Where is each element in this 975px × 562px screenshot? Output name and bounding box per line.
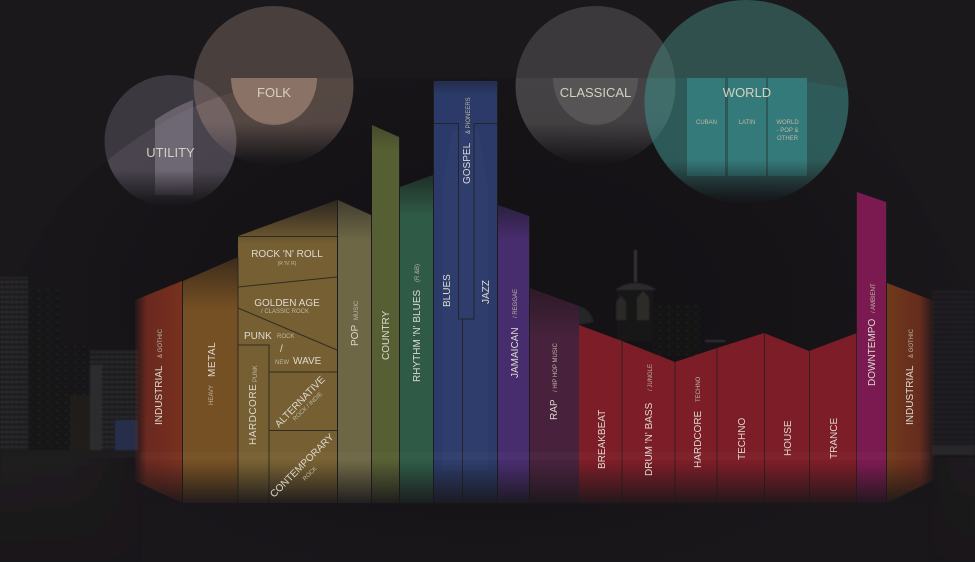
- bar: pop: [338, 200, 371, 503]
- circle: classical: [516, 6, 676, 156]
- label: punk new wave: [244, 331, 322, 367]
- label: rap: [549, 343, 560, 420]
- label: classical: CLASSICAL: [560, 85, 631, 100]
- bar group: rock: [238, 200, 337, 503]
- bar: rap: [530, 288, 579, 503]
- label: industrial left: & GOTHIC: [158, 328, 164, 358]
- label: world pop and other: - POP &: [777, 128, 798, 134]
- divider lines: [182, 81, 886, 503]
- circle: world: [644, 0, 848, 196]
- label: rhythm n blues: RHYTHM 'N' BLUES: [412, 290, 423, 382]
- label: gospel: [462, 97, 473, 184]
- label: world pop and other: OTHER: [777, 136, 799, 142]
- bar: jamaican: [498, 205, 529, 503]
- label: downtempo: DOWNTEMPO: [867, 319, 878, 386]
- label: techno: TECHNO: [737, 418, 748, 460]
- label: jamaican: [510, 289, 521, 378]
- label: hardcore techno: HARDCORE: [693, 410, 704, 468]
- bar: industrial left: [135, 281, 182, 503]
- bar group: blues, gospel, jazz: [434, 81, 497, 503]
- label: industrial left: [154, 328, 165, 425]
- label: gospel: GOSPEL: [462, 142, 473, 184]
- label: gospel: & PIONEERS: [466, 97, 472, 134]
- label: rhythm n blues: (R &B): [415, 264, 421, 282]
- label: contemporary: ROCK: [302, 466, 319, 482]
- label: house: HOUSE: [783, 420, 794, 456]
- label: folk: FOLK: [257, 85, 291, 100]
- label: trance: TRANCE: [829, 418, 840, 459]
- tower reflection in blue: [442, 130, 488, 470]
- label: rock n roll: [251, 249, 323, 267]
- bar group: electronic red: [579, 325, 857, 503]
- label: hardcore techno: TECHNO: [696, 376, 702, 402]
- label: hardcore punk: PUNK: [253, 365, 259, 382]
- circle: utility: [104, 75, 236, 199]
- label: drum n bass: / JUNGLE: [648, 364, 654, 391]
- label: world pop and other: WORLD: [776, 120, 799, 126]
- label: industrial right: & GOTHIC: [909, 328, 915, 358]
- label: blues: BLUES: [442, 274, 453, 307]
- label: alternative: ROCK / INDIE: [292, 391, 324, 422]
- label: punk new wave: PUNK: [244, 331, 272, 342]
- label: hardcore punk: HARDCORE: [248, 384, 259, 445]
- city skyline: [0, 250, 975, 562]
- label: world: WORLD: [723, 85, 771, 100]
- label: punk new wave: ROCK: [277, 334, 294, 340]
- circle: folk: [194, 6, 354, 158]
- label: alternative: ALTERNATIVE: [273, 374, 328, 430]
- label: cuban: CUBAN: [696, 120, 717, 126]
- label: hardcore techno: [693, 376, 704, 468]
- bar: industrial right: [887, 283, 934, 503]
- label: heavy metal: HEAVY: [209, 385, 215, 405]
- label: pop music: POP: [350, 325, 361, 346]
- water reflection band: [140, 452, 930, 460]
- label: punk new wave: NEW: [275, 360, 289, 366]
- label: latin: LATIN: [739, 120, 755, 126]
- bars chart: [135, 81, 934, 503]
- label: pop music: MUSIC: [354, 300, 360, 320]
- bar: rhythm and blues: [400, 175, 433, 503]
- label: jamaican: / REGGAE: [513, 289, 519, 318]
- label: industrial right: INDUSTRIAL: [905, 365, 916, 425]
- label: golden age: GOLDEN AGE: [254, 298, 320, 309]
- label: contemporary: CONTEMPORARY: [268, 432, 337, 500]
- label: golden age: [254, 298, 320, 315]
- label: rock n roll: (R 'N' R): [278, 261, 297, 267]
- label: rap: RAP: [549, 399, 560, 420]
- label: pop music: [350, 300, 361, 346]
- bar: downtempo: [857, 192, 886, 503]
- label: golden age: / CLASSIC ROCK: [261, 309, 309, 315]
- bottom fade: [135, 458, 935, 504]
- label: punk new wave: WAVE: [293, 356, 322, 367]
- label: punk new wave: /: [280, 344, 283, 355]
- bar: country: [372, 125, 399, 503]
- label: industrial right: [905, 328, 916, 425]
- label: heavy metal: METAL: [207, 342, 218, 377]
- label: rock n roll: ROCK 'N' ROLL: [251, 249, 323, 260]
- label: jazz: JAZZ: [481, 280, 492, 304]
- label: jamaican: JAMAICAN: [510, 327, 521, 378]
- bar: metal: [183, 257, 238, 503]
- label: rap: / HIP HOP MUSIC: [553, 343, 559, 392]
- label: downtempo: / AMBIENT: [871, 283, 877, 313]
- label: breakbeat: BREAKBEAT: [597, 410, 608, 469]
- label: downtempo: [867, 283, 878, 386]
- label: heavy metal: [207, 342, 218, 405]
- label: industrial left: INDUSTRIAL: [154, 365, 165, 425]
- label: utility: UTILITY: [146, 145, 195, 160]
- label: drum n bass: [644, 364, 655, 476]
- label: country: COUNTRY: [381, 310, 392, 360]
- label: drum n bass: DRUM 'N' BASS: [644, 402, 655, 476]
